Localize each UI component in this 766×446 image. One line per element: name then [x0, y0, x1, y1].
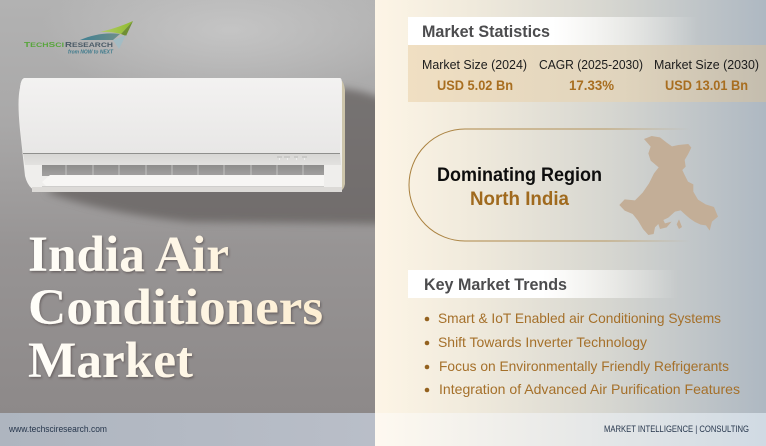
logo: TechSci Research: RESEARCH	[65, 40, 113, 49]
panel: key market trends	[408, 270, 740, 397]
region text: Dominating Region	[437, 165, 602, 186]
trend list	[425, 310, 740, 397]
footer bar left: www.techsciresearch.com	[8, 424, 107, 435]
stat: market size 2024	[422, 57, 527, 93]
title: Market	[28, 333, 193, 389]
stat: CAGR: CAGR (2025-2030)	[539, 57, 643, 72]
panel: market statistics	[408, 17, 766, 102]
region text: North India	[470, 189, 569, 210]
stat: market size 2024: Market Size (2024)	[422, 57, 527, 72]
heading: market statistics: Market Statistics	[422, 22, 550, 41]
logo: TechSci Research: from NOW to NEXT	[68, 50, 114, 56]
map: north india	[619, 136, 718, 235]
footer bar left	[0, 413, 375, 446]
air conditioner illustration	[18, 78, 385, 224]
right background panel	[375, 0, 766, 413]
stat: market size 2030	[654, 57, 759, 93]
trend list: Smart & IoT Enabled air Conditioning Systems	[438, 310, 721, 326]
logo: TechSci Research	[24, 21, 133, 56]
title	[28, 227, 323, 389]
panel: dominating region	[409, 129, 718, 241]
logo: TechSci Research: TECH S CI	[24, 40, 64, 49]
trend list: Focus on Environmentally Friendly Refrigerants	[439, 358, 729, 374]
pill outline	[409, 129, 690, 241]
heading: market statistics	[408, 17, 698, 45]
stat: CAGR	[539, 57, 643, 93]
trend list: Shift Towards Inverter Technology	[438, 334, 647, 350]
title: India Air	[28, 227, 229, 283]
heading: key market trends: Key Market Trends	[424, 275, 567, 294]
heading: key market trends	[408, 270, 678, 298]
stat: CAGR: 17.33%	[569, 77, 615, 93]
stats band	[408, 45, 766, 102]
title: Conditioners	[28, 280, 323, 336]
left background panel	[0, 0, 420, 413]
footer bar right	[375, 413, 766, 446]
region text	[437, 165, 602, 210]
stat: market size 2030: USD 13.01 Bn	[665, 77, 748, 93]
stat: market size 2024: USD 5.02 Bn	[437, 77, 513, 93]
stat: market size 2030: Market Size (2030)	[654, 57, 759, 72]
trend list: Integration of Advanced Air Purification Features	[439, 381, 740, 397]
